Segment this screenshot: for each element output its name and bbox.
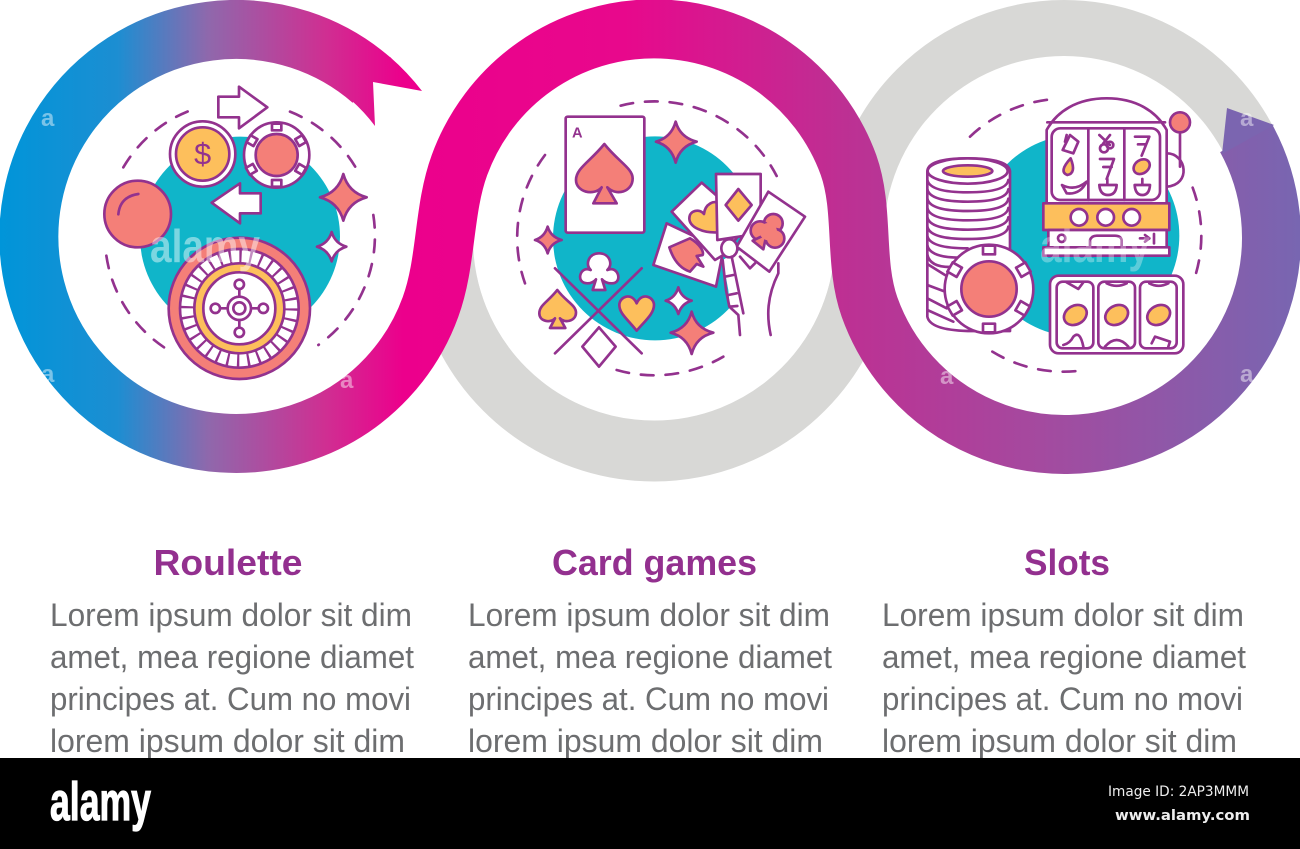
text block: roulette: lorem ipsum dolor sit dim: [50, 723, 405, 759]
sparkle left: [535, 227, 562, 253]
watermarks: alamy: [1040, 220, 1150, 272]
text block: slots: lorem ipsum dolor sit dim: [882, 723, 1237, 759]
text block: slots: amet, mea regione diamet: [882, 639, 1246, 675]
roulette wheel: [169, 238, 310, 379]
text block: slots: [882, 597, 1246, 759]
icon: slots illustration: [927, 98, 1201, 372]
spade yellow: [539, 290, 576, 328]
white disc: card games: [473, 58, 835, 420]
text block: roulette: Lorem ipsum dolor sit dim: [50, 597, 412, 633]
teal blob: [140, 137, 340, 337]
image id: Image ID: 2AP3MMM: [1108, 784, 1249, 800]
teal blob: [977, 135, 1179, 337]
white disc: slots: [884, 56, 1244, 416]
lever: [1167, 153, 1184, 187]
watermarks: a: [340, 367, 354, 394]
text block: card games: [468, 597, 832, 759]
dollar coin: $: [194, 138, 211, 172]
dashed orbit: [970, 99, 1201, 372]
hand and fan of cards: [653, 174, 805, 335]
footer bar: [0, 758, 1300, 849]
text block: roulette: [50, 597, 414, 759]
text block: slots: principes at. Cum no movi: [882, 681, 1243, 717]
watermarks: a: [1240, 361, 1254, 388]
ace of spades: A: [572, 126, 583, 142]
arrow left: [212, 183, 261, 223]
heart yellow: [619, 296, 654, 331]
watermarks: a: [41, 105, 55, 132]
dollar coin: [170, 121, 235, 187]
sparkle white: [666, 287, 692, 314]
chip stack: [927, 158, 1010, 331]
heading: slots: Slots: [1024, 542, 1110, 583]
reel symbols: [1063, 135, 1078, 153]
yellow button panel: [1043, 203, 1169, 230]
dashed orbit: [105, 108, 375, 347]
text block: slots: Lorem ipsum dolor sit dim: [882, 597, 1244, 633]
big chip: [945, 245, 1033, 333]
grey ring: slots: [857, 29, 1271, 236]
icon: card games illustration: [517, 101, 805, 375]
gradient ribbon linking the three circles: [29, 29, 1274, 445]
sparkle small: [317, 232, 346, 261]
reel panel: [1050, 276, 1183, 353]
watermarks: [41, 105, 1254, 394]
text block: card games: lorem ipsum dolor sit dim: [468, 723, 823, 759]
heading: card games: Card games: [552, 542, 757, 583]
teal blob: [553, 136, 757, 340]
sparkle large: [320, 174, 367, 221]
watermarks: alamy: [150, 220, 260, 272]
text block: card games: principes at. Cum no movi: [468, 681, 829, 717]
sparkle bottom: [671, 312, 713, 354]
text block: roulette: principes at. Cum no movi: [50, 681, 411, 717]
watermarks: a: [1240, 105, 1254, 132]
club white: [580, 253, 618, 290]
slot machine: [1043, 98, 1190, 256]
ribbon arrow head left: [351, 57, 422, 126]
watermarks: a: [940, 363, 954, 390]
diamond white: [582, 327, 616, 367]
grey ring: card games: [443, 240, 865, 451]
ace of spades: [566, 117, 644, 233]
text block: roulette: amet, mea regione diamet: [50, 639, 414, 675]
text block: card games: Lorem ipsum dolor sit dim: [468, 597, 830, 633]
sparkle top: [656, 122, 697, 163]
crossed lines: [555, 268, 642, 353]
watermarks: a: [41, 361, 55, 388]
roulette ball: [104, 181, 171, 247]
dashed orbit: [517, 101, 777, 375]
alamy logo: alamy: [50, 772, 151, 832]
arrow right: [218, 87, 267, 128]
heading: roulette: Roulette: [154, 542, 302, 583]
ribbon end right: [1222, 108, 1274, 154]
text block: card games: amet, mea regione diamet: [468, 639, 832, 675]
casino chip: [244, 122, 309, 188]
site url: www.alamy.com: [1115, 808, 1250, 824]
icon: roulette illustration: [104, 87, 375, 379]
white disc: roulette: [56, 56, 416, 416]
